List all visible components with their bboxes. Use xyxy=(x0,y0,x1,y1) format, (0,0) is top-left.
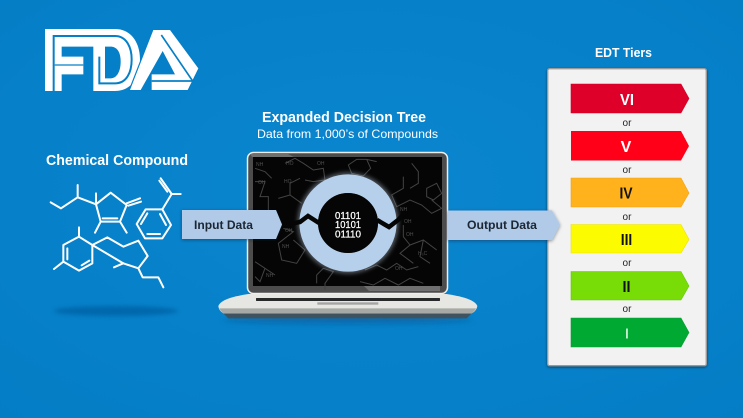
faint molecule wallpaper: OH xyxy=(404,219,412,225)
or separator: or xyxy=(623,212,632,223)
heading: Chemical Compound: Chemical Compound xyxy=(46,153,188,169)
faint molecule wallpaper: NH xyxy=(282,244,290,250)
letters F and D xyxy=(45,29,140,91)
arrow: Input Data: Input Data xyxy=(194,218,253,232)
or separator: or xyxy=(623,258,632,269)
faint molecule wallpaper: OH xyxy=(406,232,414,238)
faint molecule wallpaper: NH xyxy=(400,207,408,213)
FDA logo xyxy=(45,29,198,91)
tier III xyxy=(571,224,689,253)
tier VI: VI xyxy=(620,92,634,109)
tier IV xyxy=(571,178,689,207)
tier VI xyxy=(571,84,689,113)
letter A xyxy=(130,30,198,90)
laptop shadow xyxy=(223,316,473,324)
binary data text: 10101 xyxy=(335,219,361,231)
tier III: III xyxy=(621,232,632,249)
binary data text: 01110 xyxy=(335,228,361,240)
faint molecule wallpaper: HO xyxy=(284,179,292,185)
faint molecule wallpaper: NH xyxy=(256,162,264,168)
tier II xyxy=(571,272,689,300)
laptop base xyxy=(218,294,477,318)
panel: EDT tiers xyxy=(548,45,706,366)
tier V: V xyxy=(621,139,632,156)
tier IV: IV xyxy=(620,186,633,202)
laptop screen xyxy=(253,157,442,286)
processing ring xyxy=(290,184,406,262)
binary data text: 01101 xyxy=(335,210,361,222)
bezel highlight xyxy=(250,154,440,291)
subheading: data source: Data from 1,000’s of Compounds xyxy=(257,127,438,141)
faint molecule wallpaper: OH xyxy=(258,180,266,186)
binary data text xyxy=(335,210,361,240)
faint molecule wallpaper: H₃C xyxy=(418,251,428,257)
tier V xyxy=(571,131,689,160)
faint molecule wallpaper: OH xyxy=(395,266,403,272)
shadow under molecule xyxy=(54,306,178,316)
faint molecule wallpaper: OH xyxy=(317,161,325,167)
faint molecule wallpaper: HO xyxy=(286,161,294,167)
or separator: or xyxy=(623,304,632,315)
or separator: or xyxy=(623,118,632,129)
arrow: Output Data xyxy=(448,210,560,240)
tier I xyxy=(571,318,689,347)
faint molecule wallpaper: NH xyxy=(266,273,274,279)
arrow: Input Data xyxy=(182,210,282,239)
faint molecule wallpaper: OH xyxy=(285,228,293,234)
heading: EDT Tiers: EDT Tiers xyxy=(595,45,652,60)
laptop xyxy=(218,152,477,324)
faint molecule wallpaper xyxy=(255,158,442,290)
heading: Expanded Decision Tree: Expanded Decision Tree xyxy=(262,110,426,126)
or separator: or xyxy=(623,165,632,176)
panel background xyxy=(548,69,706,366)
laptop lid xyxy=(248,152,448,294)
arrow: Output Data: Output Data xyxy=(467,218,537,232)
tier II: II xyxy=(622,279,630,296)
ring glow xyxy=(298,172,398,274)
tier I: I xyxy=(625,326,629,342)
chemical compound structure xyxy=(51,178,181,287)
